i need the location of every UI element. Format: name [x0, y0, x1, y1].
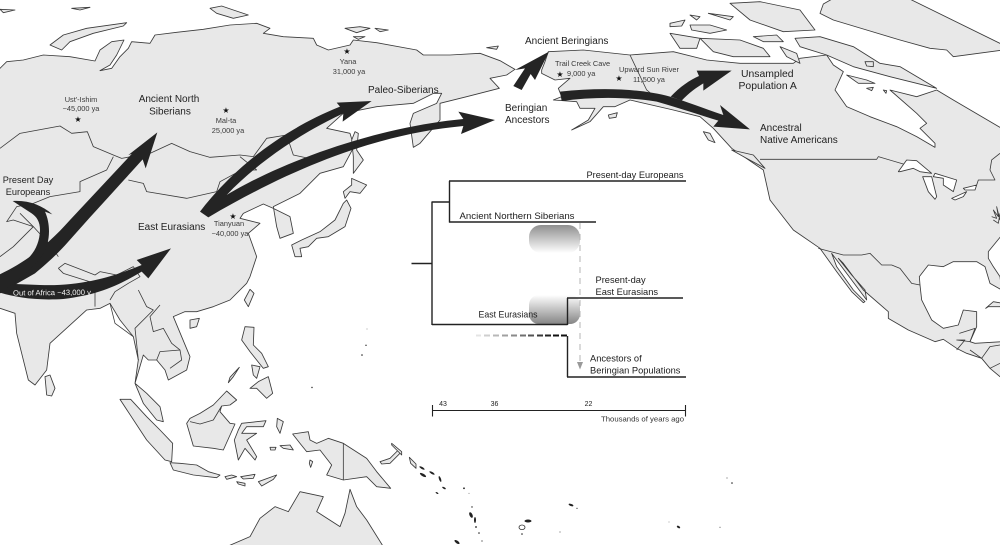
- label: Ancient North Siberians: Siberians: [149, 106, 191, 118]
- site: Ust'-Ishim: Ust'-Ishim: [65, 95, 97, 104]
- tree label: Ancestors of Beringian Populations: Ancestors of: [590, 354, 642, 364]
- arrow: to Ancestral Native Americans: [560, 89, 750, 129]
- label: Beringian Ancestors: Ancestors: [505, 115, 549, 126]
- site: Upward Sun River: ★: [615, 74, 623, 83]
- map: small Pacific islands: [311, 329, 733, 545]
- label: Ancestral Native Americans: Native Americans: [760, 135, 838, 146]
- map: Asia and northern islands: [0, 6, 515, 422]
- site: Tianyuan: Tianyuan: [214, 219, 244, 228]
- site: Mal-ta: 25,000 ya: [212, 126, 245, 135]
- population tree diagram: [412, 170, 686, 424]
- site: Upward Sun River: 11,500 ya: [633, 75, 666, 84]
- site: Trail Creek Cave: Trail Creek Cave: [555, 59, 610, 68]
- arrow: to East Eurasians: [0, 248, 171, 299]
- time axis: Thousands of years ago: [601, 414, 684, 424]
- label: Present Day Europeans: Present Day: [3, 175, 53, 185]
- label: Unsampled Population A: Population A: [738, 81, 797, 92]
- arrows: to Paleo-Siberians and Beringian Ancestors: [200, 101, 495, 217]
- label: Unsampled Population A: Unsampled: [741, 69, 794, 80]
- label: Ancient Beringians: Ancient Beringians: [525, 36, 608, 47]
- site: Yana: [333, 47, 366, 76]
- tree label: Present-day Europeans: Present-day Europeans: [586, 170, 684, 180]
- site: Ust'-Ishim: ~45,000 ya: [63, 104, 100, 113]
- arrow: to Ancient North Siberians: [0, 132, 157, 293]
- time axis: [432, 401, 686, 424]
- tree label: Ancestors of Beringian Populations: Beringian Populations: [590, 366, 681, 376]
- tree label: Present-day East Eurasians: Present-day: [596, 275, 646, 285]
- map: island outlines in the south Pacific: [519, 525, 525, 530]
- site: Ust'-Ishim: ★: [74, 115, 82, 124]
- label: Ancient North Siberians: Ancient North: [139, 94, 199, 105]
- arrows: Out of Africa to East Eurasians, Siberians and Europeans: [0, 101, 495, 299]
- label: Ancestral Native Americans: Ancestral: [760, 123, 802, 134]
- site: Trail Creek Cave: 9,000 ya: [567, 69, 596, 78]
- admixture gradient: lower: [529, 295, 580, 324]
- tree branches: [412, 181, 686, 377]
- map: Southeast Asia and Oceania: [45, 289, 416, 545]
- arrow: to Present Day Europeans: [0, 201, 52, 293]
- site: Upward Sun River: [615, 65, 680, 84]
- label: Beringian Ancestors: Beringian: [505, 103, 547, 114]
- site: Yana: ★: [343, 47, 351, 56]
- site: Yana: Yana: [340, 57, 357, 66]
- arrow: to Unsampled Population A: [671, 71, 732, 101]
- site: Trail Creek Cave: ★: [556, 70, 564, 79]
- time axis: 36: [491, 401, 498, 408]
- tree label: Ancient Northern Siberians: Ancient Northern Siberians: [460, 211, 575, 221]
- arrow: to Ancient Beringians: [513, 52, 549, 90]
- site: Mal-ta: [212, 106, 245, 135]
- site: Mal-ta: ★: [222, 106, 230, 115]
- site: Yana: 31,000 ya: [333, 67, 366, 76]
- label: Paleo-Siberians: Paleo-Siberians: [368, 85, 439, 96]
- site: Tianyuan: ★: [229, 212, 237, 221]
- site: Tianyuan: [212, 212, 249, 238]
- site: Upward Sun River: Upward Sun River: [619, 65, 680, 74]
- arrows: Beringia to the Americas: [513, 52, 750, 129]
- tree label: East Eurasians: East Eurasians: [478, 310, 538, 320]
- gene flow dashed arrow: [577, 223, 583, 370]
- tree label: Present-day East Eurasians: East Eurasians: [596, 287, 658, 297]
- site: Trail Creek Cave: [555, 59, 610, 79]
- map: North America: [542, 0, 1000, 377]
- time axis: 22: [585, 401, 592, 408]
- label: Out of Africa: Out of Africa ~43,000 y: [13, 288, 91, 297]
- label: East Eurasians: East Eurasians: [138, 222, 205, 233]
- time axis: 43: [439, 401, 447, 408]
- site: Mal-ta: Mal-ta: [216, 116, 237, 125]
- admixture gradient: upper: [529, 225, 580, 253]
- fading dashed branch: [476, 334, 567, 336]
- label: Present Day Europeans: Europeans: [6, 187, 51, 197]
- site: Ust'-Ishim: [63, 95, 100, 124]
- site: Tianyuan: ~40,000 ya: [212, 229, 249, 238]
